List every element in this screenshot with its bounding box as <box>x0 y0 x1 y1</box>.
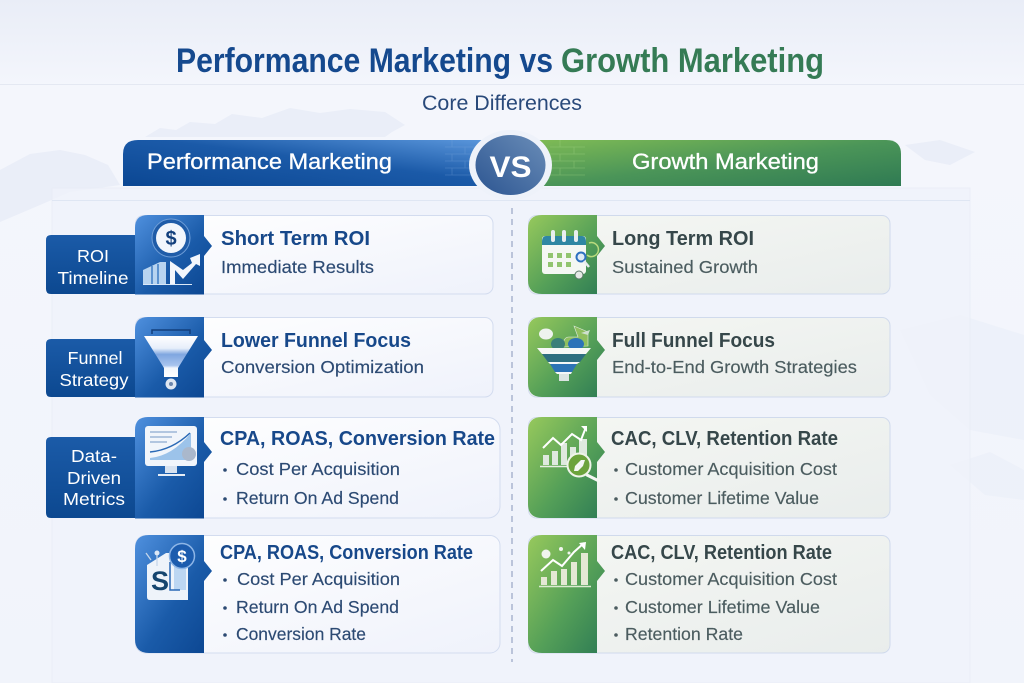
icon: lower funnel <box>144 330 198 390</box>
header: Performance Marketing <box>123 140 490 186</box>
subtitle: Core Differences <box>422 92 582 115</box>
card: CPA, ROAS, Conversion Rate (short): Cost Per Acquisition <box>236 459 400 479</box>
card: CAC, CLV, Retention Rate (short): Customer Acquisition Cost <box>625 459 837 479</box>
card: Short Term ROI: Short Term ROI <box>221 228 370 250</box>
icon: document with dollar badge: S <box>151 566 169 596</box>
card: CAC, CLV, Retention Rate (short): Customer Lifetime Value <box>625 488 819 508</box>
tab: Funnel Strategy: Strategy <box>60 370 129 390</box>
card: Short Term ROI <box>135 215 493 294</box>
card: CAC, CLV, Retention Rate (full): Customer Acquisition Cost <box>625 569 837 589</box>
card: Full Funnel Focus <box>528 317 890 397</box>
tab: ROI Timeline <box>46 235 140 294</box>
card: CAC, CLV, Retention Rate (full): CAC, CLV, Retention Rate <box>611 542 832 564</box>
card: CPA, ROAS, Conversion Rate (full): Conversion Rate <box>236 624 366 644</box>
icon: monitor with chart <box>145 426 197 476</box>
content panel <box>52 188 970 683</box>
panel: growth marketing column <box>528 215 890 653</box>
tab: Data-Driven Metrics: Data- <box>71 446 117 466</box>
icon: full funnel <box>537 326 591 381</box>
header label: Growth Marketing <box>632 149 819 174</box>
card: CPA, ROAS, Conversion Rate (full): Cost Per Acquisition <box>237 569 400 589</box>
card: CPA, ROAS, Conversion Rate (full): CPA, ROAS, Conversion Rate <box>220 542 473 564</box>
card: Long Term ROI: Sustained Growth <box>612 257 758 277</box>
card: CAC, CLV, Retention Rate (short): CAC, CLV, Retention Rate <box>611 428 838 450</box>
title: Growth Marketing <box>561 42 824 80</box>
icon: document with dollar badge: $ <box>177 547 187 566</box>
header label: Performance Marketing <box>147 149 392 174</box>
tab: Data-Driven Metrics <box>46 437 140 518</box>
card: CPA, ROAS, Conversion Rate (full) <box>135 535 500 653</box>
card: Long Term ROI <box>528 215 890 294</box>
icon: document with dollar badge <box>146 544 194 600</box>
card: CPA, ROAS, Conversion Rate (short): CPA, ROAS, Conversion Rate <box>220 428 495 450</box>
world map backdrop <box>0 108 1024 500</box>
title: Performance Marketing vs <box>176 42 553 80</box>
card: CAC, CLV, Retention Rate (full): Customer Lifetime Value <box>625 597 820 617</box>
tab: ROI Timeline: Timeline <box>58 268 128 288</box>
VS badge <box>469 130 552 200</box>
icon: calendar <box>542 232 598 279</box>
card: CPA, ROAS, Conversion Rate (short): Return On Ad Spend <box>236 488 399 508</box>
card: CPA, ROAS, Conversion Rate (short) <box>135 417 500 518</box>
header: Growth Marketing <box>535 140 901 186</box>
card: CAC, CLV, Retention Rate (full) <box>528 535 890 653</box>
card: Lower Funnel Focus <box>135 317 493 398</box>
card: Short Term ROI: Immediate Results <box>221 257 374 277</box>
card: Long Term ROI: Long Term ROI <box>612 228 754 250</box>
title band <box>0 84 1024 85</box>
icon: bar chart with magnifier <box>540 426 599 481</box>
tab: Funnel Strategy: Funnel <box>68 348 122 368</box>
card: CPA, ROAS, Conversion Rate (full): Return On Ad Spend <box>236 597 399 617</box>
tab: Funnel Strategy <box>46 339 140 397</box>
card: Full Funnel Focus: End-to-End Growth Strategies <box>612 357 857 377</box>
panel: performance marketing column <box>46 215 500 653</box>
VS badge: VS <box>490 151 532 184</box>
card: Lower Funnel Focus: Lower Funnel Focus <box>221 330 411 352</box>
card: Lower Funnel Focus: Conversion Optimization <box>221 357 424 377</box>
tab: Data-Driven Metrics: Metrics <box>63 489 125 509</box>
card: Full Funnel Focus: Full Funnel Focus <box>612 330 775 352</box>
column divider <box>511 208 513 662</box>
tab: ROI Timeline: ROI <box>77 246 109 266</box>
icon: clock and growth arrow <box>143 219 200 284</box>
card: CAC, CLV, Retention Rate (full): Retention Rate <box>625 624 743 644</box>
icon: clock and growth arrow: $ <box>165 228 177 250</box>
card: CAC, CLV, Retention Rate (short) <box>528 417 890 518</box>
icon: rising bar chart <box>539 542 591 586</box>
tab: Data-Driven Metrics: Driven <box>67 468 121 488</box>
